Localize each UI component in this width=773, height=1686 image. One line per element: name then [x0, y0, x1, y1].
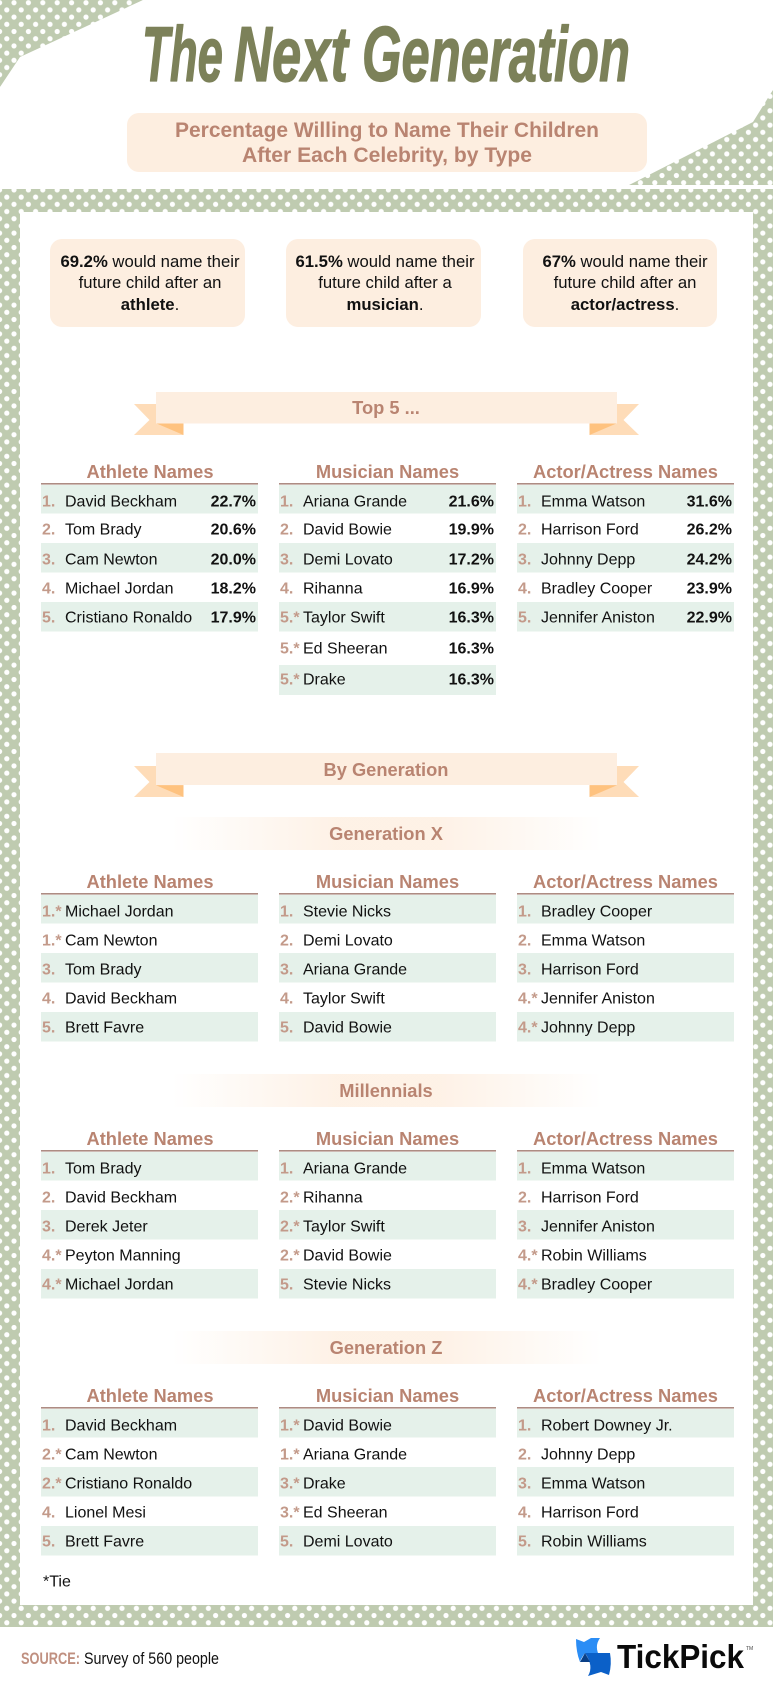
row 5: 22.9%	[687, 609, 732, 626]
row 3	[41, 1210, 258, 1240]
row 3	[279, 1210, 496, 1240]
row 5: 16.3%	[449, 609, 494, 626]
row 2: 20.6%	[211, 521, 256, 538]
row 3: Cam Newton	[65, 551, 157, 568]
heading: Actor/Actress Names	[533, 1385, 718, 1406]
row 2: David Beckham	[65, 1189, 177, 1206]
row 3: Tom Brady	[65, 961, 141, 978]
table: Generation Z actor/actress names	[517, 1385, 734, 1556]
row 3: 3.*	[280, 1475, 300, 1492]
row 4: 4.*	[518, 990, 538, 1007]
ribbon heading: Top 5: Top 5 ...	[352, 397, 420, 418]
heading: Actor/Actress Names	[533, 1128, 718, 1149]
heading: Musician Names	[316, 1128, 459, 1149]
row 1: 22.7%	[211, 493, 256, 510]
row 5	[279, 1012, 496, 1042]
row 3: 20.0%	[211, 551, 256, 568]
row 1: 1.	[518, 1417, 531, 1434]
row 2: 2.	[280, 521, 293, 538]
row 2: Tom Brady	[65, 521, 141, 538]
row 1: Emma Watson	[541, 1160, 645, 1177]
row 4: Taylor Swift	[303, 990, 385, 1007]
row 5: Johnny Depp	[541, 1019, 635, 1036]
row 1	[279, 895, 496, 924]
row 4: Peyton Manning	[65, 1247, 181, 1264]
row 2: 2.	[518, 932, 531, 949]
row 5	[41, 1269, 258, 1298]
row 3: 24.2%	[687, 551, 732, 568]
row 1: 1.	[42, 493, 55, 510]
row 5: 4.*	[518, 1276, 538, 1293]
row 4	[42, 580, 256, 597]
row 7: 5.*	[280, 671, 300, 688]
heading rule	[279, 1150, 496, 1152]
row 2: 2.	[518, 1446, 531, 1463]
row 5: Michael Jordan	[65, 1276, 174, 1293]
heading: Athlete Names	[86, 1128, 214, 1149]
row 2: 1.*	[42, 932, 62, 949]
heading rule	[41, 1407, 258, 1409]
row 3	[41, 1467, 258, 1496]
heading rule	[279, 483, 496, 485]
row 2: 2.	[42, 521, 55, 538]
row 1	[41, 895, 258, 924]
row 5: Robin Williams	[541, 1533, 647, 1550]
row 4: 4.	[518, 580, 531, 597]
row 5: 4.*	[42, 1276, 62, 1293]
row 3	[517, 543, 734, 572]
row 1	[517, 895, 734, 924]
row 1	[517, 1152, 734, 1180]
row 7	[279, 665, 496, 695]
source line: Survey of 560 people	[84, 1650, 219, 1668]
row 5	[517, 1526, 734, 1556]
row 2: 1.*	[280, 1446, 300, 1463]
row 2: Emma Watson	[541, 932, 645, 949]
row 2: Harrison Ford	[541, 521, 639, 538]
row 4	[280, 580, 494, 597]
table: Millennials musician names	[279, 1128, 496, 1298]
row 3	[279, 543, 496, 572]
row 2: Cam Newton	[65, 1446, 157, 1463]
heading rule	[517, 483, 734, 485]
icon: TickPick logo mark	[576, 1638, 611, 1676]
callout: actor: actor/actress.	[571, 295, 679, 314]
row 2: 19.9%	[449, 521, 494, 538]
row 1: Bradley Cooper	[541, 903, 653, 920]
heading rule	[517, 1407, 734, 1409]
row 3: Derek Jeter	[65, 1218, 148, 1235]
row 3: 3.	[42, 1218, 55, 1235]
row 1: David Beckham	[65, 493, 177, 510]
logo wordmark: TickPick	[617, 1638, 745, 1675]
title: Next	[234, 10, 350, 98]
heading rule	[41, 1150, 258, 1152]
row 1: Robert Downey Jr.	[541, 1417, 673, 1434]
row 5: 5.	[42, 609, 55, 626]
row 5	[517, 602, 734, 632]
row 1	[41, 1409, 258, 1438]
row 6	[280, 640, 494, 657]
table: Generation X actor/actress names	[517, 871, 734, 1042]
row 5: 5.*	[280, 609, 300, 626]
row 1: 1.	[42, 1160, 55, 1177]
row 3: 3.	[42, 961, 55, 978]
row 5: 5.	[280, 1533, 293, 1550]
row 5: 5.	[518, 609, 531, 626]
row 2: Johnny Depp	[541, 1446, 635, 1463]
row 3: 2.*	[280, 1218, 300, 1235]
heading: Actor/Actress Names	[533, 461, 718, 482]
row 5: 4.*	[518, 1019, 538, 1036]
table: Generation X athlete names	[41, 871, 258, 1042]
subheading: Millennials: Millennials	[339, 1080, 433, 1101]
row 3: 3.	[42, 551, 55, 568]
row 3: Ariana Grande	[303, 961, 407, 978]
ribbon heading: By Generation: By Generation	[324, 759, 448, 780]
footnote: tie: *Tie	[43, 1573, 71, 1590]
row 3: Drake	[303, 1475, 346, 1492]
row 6: 5.*	[280, 640, 300, 657]
heading rule	[517, 893, 734, 895]
row 2: 2.*	[280, 1189, 300, 1206]
row 4: 16.9%	[449, 580, 494, 597]
row 3: Johnny Depp	[541, 551, 635, 568]
row 3: 3.	[280, 551, 293, 568]
row 1	[279, 1409, 496, 1438]
row 3	[517, 1467, 734, 1496]
row 5	[279, 1269, 496, 1298]
row 1: David Beckham	[65, 1417, 177, 1434]
row 6: Ed Sheeran	[303, 640, 388, 657]
row 5: Demi Lovato	[303, 1533, 393, 1550]
row 1	[517, 485, 734, 514]
row 2: 2.	[42, 1189, 55, 1206]
title	[142, 10, 630, 98]
row 2: Harrison Ford	[541, 1189, 639, 1206]
row 2: 2.	[280, 932, 293, 949]
decorative corner: top right dotted	[629, 90, 773, 185]
row 2: 2.*	[42, 1446, 62, 1463]
row 5: 17.9%	[211, 609, 256, 626]
row 5: Bradley Cooper	[541, 1276, 653, 1293]
row 7: Drake	[303, 671, 346, 688]
row 2: Rihanna	[303, 1189, 363, 1206]
row 4: 4.	[280, 580, 293, 597]
row 4: 4.*	[42, 1247, 62, 1264]
row 1: 1.	[280, 493, 293, 510]
row 1: 1.	[42, 1417, 55, 1434]
row 2: 2.	[518, 1189, 531, 1206]
row 5	[279, 1526, 496, 1556]
table: Generation X musician names	[279, 871, 496, 1042]
row 2: David Bowie	[303, 521, 392, 538]
row 2	[42, 521, 256, 538]
logo wordmark: TM	[746, 1646, 753, 1652]
row 5: David Bowie	[303, 1019, 392, 1036]
row 1: Emma Watson	[541, 493, 645, 510]
row 3: 17.2%	[449, 551, 494, 568]
table: Generation Z musician names	[279, 1385, 496, 1556]
row 4: 4.	[518, 1504, 531, 1521]
ribbon heading: By Generation	[134, 753, 639, 797]
row 1	[517, 1409, 734, 1438]
row 3	[41, 543, 258, 572]
subtitle panel	[127, 113, 647, 172]
row 4: 2.*	[280, 1247, 300, 1264]
row 5	[517, 1012, 734, 1042]
row 2: 26.2%	[687, 521, 732, 538]
row 1: 1.	[280, 1160, 293, 1177]
row 1	[279, 1152, 496, 1180]
row 4: 23.9%	[687, 580, 732, 597]
row 5	[41, 1012, 258, 1042]
row 1: 1.*	[42, 903, 62, 920]
row 4: 4.	[42, 990, 55, 1007]
subheading: Generation Z	[172, 1331, 602, 1364]
row 4: 4.*	[518, 1247, 538, 1264]
row 4: Michael Jordan	[65, 580, 174, 597]
row 5: Cristiano Ronaldo	[65, 609, 192, 626]
row 4: 3.*	[280, 1504, 300, 1521]
heading: Musician Names	[316, 461, 459, 482]
row 5: Brett Favre	[65, 1019, 144, 1036]
row 6: 16.3%	[449, 640, 494, 657]
subheading: Generation X	[172, 817, 602, 850]
table: Generation Z athlete names	[41, 1385, 258, 1556]
callout: musician: musician.	[347, 295, 423, 314]
heading rule	[517, 1150, 734, 1152]
row 3	[517, 953, 734, 982]
row 5: 5.	[42, 1533, 55, 1550]
source line	[21, 1650, 219, 1668]
row 5	[279, 602, 496, 632]
row 2	[280, 521, 494, 538]
row 5: Jennifer Aniston	[541, 609, 655, 626]
row 3	[41, 953, 258, 982]
row 4: David Bowie	[303, 1247, 392, 1264]
callout: athlete: athlete.	[121, 295, 179, 314]
table: Millennials actor/actress names	[517, 1128, 734, 1298]
row 2	[518, 521, 732, 538]
row 2: Cam Newton	[65, 932, 157, 949]
row 1: 1.*	[280, 1417, 300, 1434]
row 1: 1.	[518, 903, 531, 920]
row 3: 3.	[518, 1475, 531, 1492]
row 3: 3.	[518, 961, 531, 978]
row 4: Ed Sheeran	[303, 1504, 388, 1521]
decorative corner: top left dotted	[0, 0, 143, 87]
row 5: Taylor Swift	[303, 609, 385, 626]
callout: musician	[286, 239, 481, 327]
row 1: 1.	[280, 903, 293, 920]
heading: Musician Names	[316, 871, 459, 892]
subtitle panel: After Each Celebrity, by Type	[242, 143, 532, 167]
row 1	[41, 485, 258, 514]
title: Generation	[362, 10, 630, 98]
subheading: Generation X: Generation X	[329, 823, 444, 844]
row 3: Emma Watson	[541, 1475, 645, 1492]
table: top 5 athlete names	[41, 461, 258, 632]
subheading: Generation Z: Generation Z	[330, 1337, 442, 1358]
row 3	[279, 1467, 496, 1496]
row 5: 5.	[518, 1533, 531, 1550]
row 1: Michael Jordan	[65, 903, 174, 920]
row 2: Ariana Grande	[303, 1446, 407, 1463]
row 3: 3.	[518, 551, 531, 568]
row 4	[518, 580, 732, 597]
callout: actor: future child after an	[554, 273, 696, 292]
row 1: Ariana Grande	[303, 493, 407, 510]
callout: actor: 67% would name their	[542, 252, 708, 271]
row 3	[517, 1210, 734, 1240]
row 5	[41, 1526, 258, 1556]
row 1: 21.6%	[449, 493, 494, 510]
row 3: Cristiano Ronaldo	[65, 1475, 192, 1492]
row 3: Jennifer Aniston	[541, 1218, 655, 1235]
row 1: Stevie Nicks	[303, 903, 391, 920]
heading rule	[41, 483, 258, 485]
source line: SOURCE:	[21, 1650, 80, 1668]
row 4: Bradley Cooper	[541, 580, 653, 597]
row 5: 5.	[280, 1019, 293, 1036]
row 1	[41, 1152, 258, 1180]
subheading: Millennials	[172, 1074, 602, 1107]
callout: athlete	[50, 239, 245, 327]
heading: Athlete Names	[86, 1385, 214, 1406]
row 5	[41, 602, 258, 632]
callout: actor	[523, 239, 717, 327]
row 3: Harrison Ford	[541, 961, 639, 978]
row 7: 16.3%	[449, 671, 494, 688]
table: top 5 actor/actress names	[517, 461, 734, 632]
row 4: Jennifer Aniston	[541, 990, 655, 1007]
callout: musician: future child after a	[318, 273, 453, 292]
title: The	[142, 10, 223, 98]
heading: Athlete Names	[86, 871, 214, 892]
row 3: Demi Lovato	[303, 551, 393, 568]
heading: Musician Names	[316, 1385, 459, 1406]
row 5: Stevie Nicks	[303, 1276, 391, 1293]
row 2: 2.	[518, 521, 531, 538]
row 5: Brett Favre	[65, 1533, 144, 1550]
callout: athlete: 69.2% would name their	[60, 252, 240, 271]
row 4: Robin Williams	[541, 1247, 647, 1264]
row 5: 5.	[42, 1019, 55, 1036]
heading rule	[279, 1407, 496, 1409]
row 5	[517, 1269, 734, 1298]
callout: musician: 61.5% would name their	[295, 252, 475, 271]
row 1: 31.6%	[687, 493, 732, 510]
row 4: Rihanna	[303, 580, 363, 597]
row 4: 4.	[280, 990, 293, 1007]
heading rule	[41, 893, 258, 895]
row 4: 4.	[42, 1504, 55, 1521]
row 5: 5.	[280, 1276, 293, 1293]
subtitle panel: Percentage Willing to Name Their Children	[175, 118, 599, 142]
row 3: 3.	[518, 1218, 531, 1235]
row 1	[279, 485, 496, 514]
heading: Athlete Names	[86, 461, 214, 482]
table: top 5 musician names	[279, 461, 496, 695]
row 1: David Bowie	[303, 1417, 392, 1434]
row 3: 2.*	[42, 1475, 62, 1492]
row 2: Demi Lovato	[303, 932, 393, 949]
row 4: 18.2%	[211, 580, 256, 597]
row 4: Lionel Mesi	[65, 1504, 146, 1521]
row 4: Harrison Ford	[541, 1504, 639, 1521]
heading: Actor/Actress Names	[533, 871, 718, 892]
row 4: 4.	[42, 580, 55, 597]
table: Millennials athlete names	[41, 1128, 258, 1298]
row 3	[279, 953, 496, 982]
row 4: David Beckham	[65, 990, 177, 1007]
row 3: Taylor Swift	[303, 1218, 385, 1235]
row 1: Ariana Grande	[303, 1160, 407, 1177]
row 3: 3.	[280, 961, 293, 978]
heading rule	[279, 893, 496, 895]
callout: athlete: future child after an	[79, 273, 221, 292]
row 1: 1.	[518, 1160, 531, 1177]
ribbon heading: Top 5	[134, 392, 639, 435]
row 1: 1.	[518, 493, 531, 510]
row 1: Tom Brady	[65, 1160, 141, 1177]
